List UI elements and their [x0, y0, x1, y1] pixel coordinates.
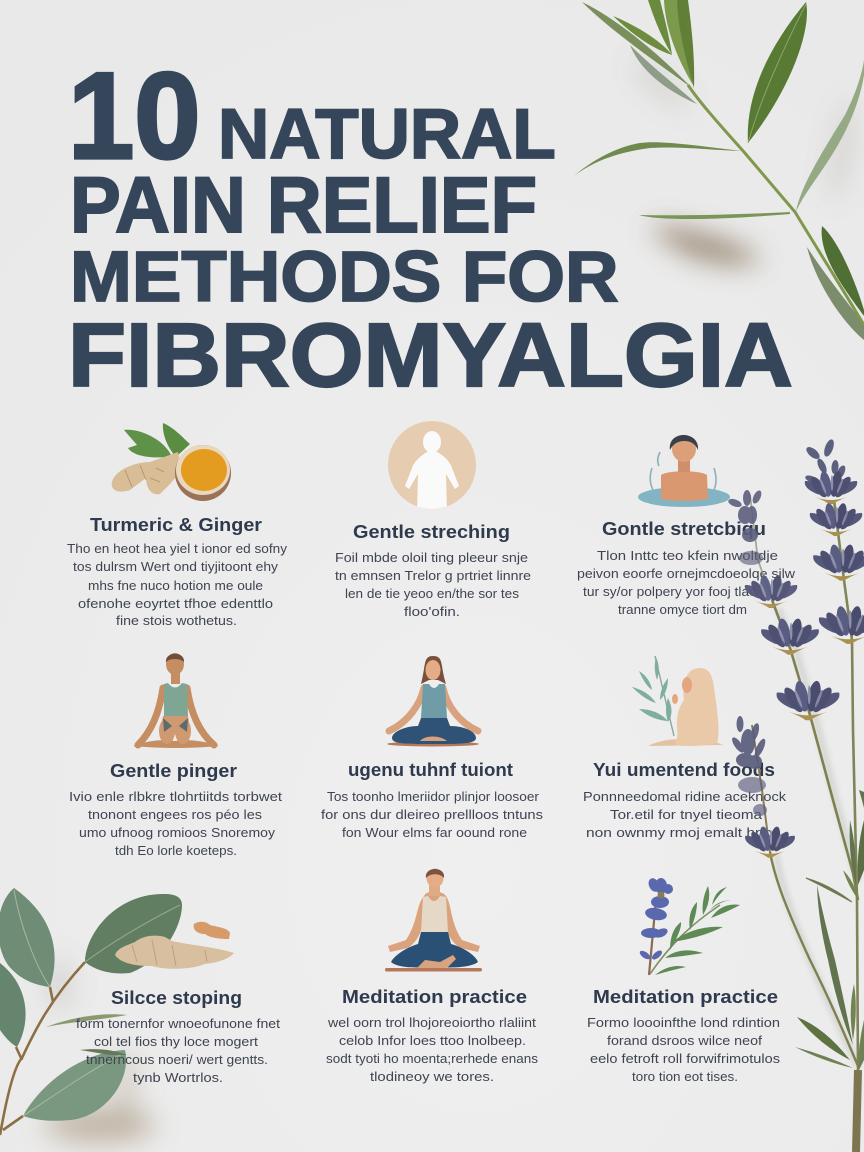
body text: umo ufnoog romioos Snoremoy — [79, 826, 276, 840]
body text — [577, 549, 796, 617]
icon: meditating woman — [387, 656, 479, 746]
body text — [69, 790, 283, 858]
card 1: turmeric and ginger — [67, 423, 288, 628]
lavender heads: left stem — [730, 716, 795, 858]
title line: methods for: METHODS FOR — [70, 237, 619, 317]
stems — [834, 500, 858, 1075]
body text: tynb Wortrlos. — [133, 1071, 223, 1085]
body text: Foil mbde oloil ting pleeur snje — [335, 551, 528, 565]
body text: peivon eoorfe ornejmcdoeolqe silw — [577, 567, 796, 581]
body text: for ons dur dleireo prellloos tntuns — [321, 808, 543, 822]
body text: col tel fios thy loce mogert — [94, 1035, 259, 1049]
body text: ofenohe eoyrtet tfhoe edenttlo — [78, 597, 273, 611]
eucalyptus branch — [0, 888, 182, 1135]
card 4: gentle pinger — [69, 653, 283, 858]
card 8: meditation practice — [326, 868, 538, 1084]
heading: Yui umentend foods — [593, 759, 775, 780]
body text: tlodineoy we tores. — [370, 1070, 494, 1084]
heading: Gontle stretcbiqu — [602, 518, 766, 539]
card 2: gentle streching — [335, 421, 531, 619]
body text: tranne omyce tiort dm — [618, 603, 747, 617]
lavender shadows — [776, 608, 858, 1066]
body text: tnnerncous noeri/ wert gentts. — [86, 1053, 268, 1067]
body text: tnonont engees ros péo les — [88, 808, 262, 822]
icon: seated figure — [133, 653, 219, 748]
body text — [67, 542, 288, 628]
icon: body in circle — [388, 421, 476, 512]
body text: wel oorn trol lhojoreoiortho rlaliint — [327, 1016, 537, 1030]
body text: tos dulrsm Wert ond tiyjitoont ehy — [73, 560, 279, 574]
body text: sodt tyoti ho moenta;rerhede enans — [326, 1052, 538, 1066]
title line: natural: NATURAL — [218, 94, 556, 173]
body text: tur sy/or polpery yor fooj tlac — [583, 585, 756, 599]
heading: Turmeric & Ginger — [90, 514, 262, 535]
title line: pain relief: PAIN RELIEF — [70, 162, 537, 249]
body text: tn emnsen Trelor g prtriet linnre — [335, 569, 531, 583]
body text — [326, 1016, 538, 1084]
body text: mhs fne nuco hotion me oule — [88, 579, 263, 593]
top-right olive branch — [574, 0, 864, 340]
body text — [587, 1016, 780, 1084]
card 3: warm bath — [577, 435, 796, 617]
body text: non ownmy rmoj emalt hnoc — [586, 826, 780, 840]
heading: ugenu tuhnf tuiont — [348, 759, 513, 780]
icon: turmeric and ginger — [112, 423, 231, 501]
body text: forand dsroos wilce neof — [607, 1034, 763, 1048]
title line: fibromyalgia: FIBROMYALGIA — [68, 304, 793, 405]
body text: len de tie yeoo en/the sor tes — [345, 587, 519, 601]
heading: Gentle pinger — [110, 760, 237, 781]
lavender heads: right stem — [804, 438, 864, 644]
body text — [583, 790, 787, 840]
card 6: plant and kneeling woman — [583, 656, 787, 840]
body text: Formo loooinfthe lond rdintion — [587, 1016, 780, 1030]
body text — [321, 790, 543, 840]
card 9: meditation practice herbs — [587, 877, 780, 1084]
card 7: silcce stoping — [76, 922, 281, 1085]
title — [68, 48, 793, 405]
icon: person in water — [638, 435, 730, 507]
lower leaves — [795, 790, 864, 1072]
body text: Tos toonho lmeriidor plinjor loosoer — [327, 790, 539, 804]
body text: toro tion eot tises. — [632, 1070, 738, 1084]
heading: Meditation practice — [593, 986, 778, 1007]
body text: celob Infor loes ttoo lnolbeep. — [339, 1034, 526, 1048]
lavender sprigs — [727, 438, 864, 1152]
body text: Ivio enle rlbkre tlohrtiitds torbwet — [69, 790, 283, 804]
lavender heads: middle stem — [727, 489, 840, 720]
heading: Gentle streching — [353, 521, 510, 542]
body text: fon Wour elms far oound rone — [342, 826, 527, 840]
body text — [335, 551, 531, 619]
title line: 10: 10 — [68, 48, 201, 184]
body text: Tor.etil for tnyel tieoma — [610, 808, 762, 822]
heading: Silcce stoping — [111, 987, 242, 1008]
body text: form tonernfor wnoeofunone fnet — [76, 1017, 281, 1031]
icon: plant and kneeling woman — [632, 656, 723, 746]
heading: Meditation practice — [342, 986, 527, 1007]
body text: floo'ofin. — [404, 605, 460, 619]
body text: tdh Eo lorle koeteps. — [115, 844, 237, 858]
body text: Tho en heot hea yiel t ionor ed sofny — [67, 542, 288, 556]
body text — [76, 1017, 281, 1085]
body text: eelo fetroft roll forwifrimotulos — [590, 1052, 780, 1066]
icon: meditating figure — [385, 868, 482, 972]
card 5: meditation figure — [321, 656, 543, 840]
body text: Tlon Inttc teo kfein nwoltdje — [597, 549, 778, 563]
icon: ginger root — [115, 922, 234, 969]
icon: lavender and rosemary — [638, 877, 740, 975]
body text: Ponnneedomal ridine aceknock — [583, 790, 787, 804]
body text: fine stois wothetus. — [116, 614, 237, 628]
